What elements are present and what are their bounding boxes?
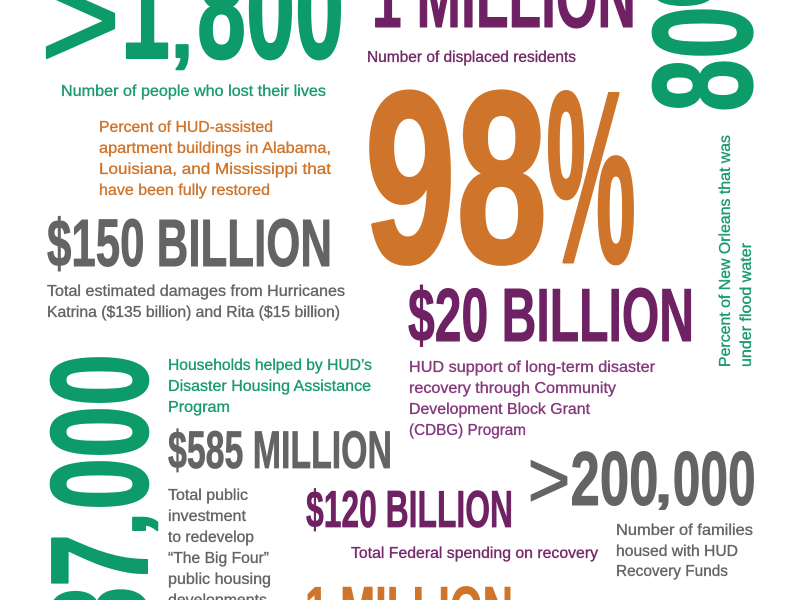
caption: federal spending: Total Federal spending on recovery bbox=[351, 545, 598, 562]
caption: families housed: Number of families bbox=[616, 522, 753, 539]
text: % bbox=[546, 40, 636, 314]
caption: CDBG support bbox=[409, 359, 655, 439]
stat: 98 percent: 98 bbox=[364, 40, 548, 314]
text block: HUD-assisted buildings bbox=[99, 119, 332, 199]
caption: displaced residents: Number of displaced residents bbox=[367, 49, 576, 66]
text block: HUD-assisted buildings: apartment buildings in Alabama, bbox=[99, 140, 331, 157]
caption: CDBG support: Development Block Grant bbox=[409, 401, 591, 418]
caption: lives lost: Number of people who lost their lives bbox=[61, 83, 326, 100]
caption: housing assistance: Disaster Housing Assistance bbox=[168, 378, 371, 395]
caption: Big Four investment: “The Big Four” bbox=[168, 550, 269, 567]
caption: CDBG support: recovery through Community bbox=[409, 380, 616, 397]
stat: over 200,000: , bbox=[655, 460, 672, 513]
caption: Big Four investment: investment bbox=[168, 508, 247, 525]
caption: Big Four investment: Total public bbox=[168, 487, 248, 504]
text block: HUD-assisted buildings: Percent of HUD-assisted bbox=[99, 119, 273, 136]
caption: CDBG support: (CDBG) Program bbox=[409, 422, 526, 439]
caption: housing assistance bbox=[168, 357, 372, 416]
stat: 87,000 rotated: 000 bbox=[23, 354, 177, 510]
caption: CDBG support: HUD support of long-term disaster bbox=[409, 359, 655, 376]
text block: HUD-assisted buildings: have been fully restored bbox=[99, 182, 270, 199]
caption: estimated damages: Katrina ($135 billion) and Rita ($15 billion) bbox=[47, 304, 340, 321]
caption: families housed bbox=[616, 522, 753, 580]
caption: Big Four investment bbox=[168, 487, 271, 600]
caption: flood water rotated: under flood water bbox=[738, 243, 755, 367]
caption: housing assistance: Program bbox=[168, 399, 230, 416]
stat: 87,000 rotated: , bbox=[73, 512, 162, 536]
stat: 150 billion: $150 BILLION bbox=[47, 206, 332, 281]
stat: 585 million: $585 MILLION bbox=[168, 421, 392, 480]
stat: over 200,000: 200 bbox=[570, 437, 658, 522]
caption: Big Four investment: to redevelop bbox=[168, 529, 254, 546]
caption: families housed: Recovery Funds bbox=[616, 563, 728, 580]
caption: housing assistance: Households helped by HUD’s bbox=[168, 357, 372, 374]
caption: flood water rotated bbox=[717, 135, 755, 367]
caption: Big Four investment: public housing bbox=[168, 571, 271, 588]
caption: estimated damages: Total estimated damages from Hurricanes bbox=[47, 283, 345, 300]
stat: 120 billion: $120 BILLION bbox=[306, 481, 513, 539]
text block: HUD-assisted buildings: Louisiana, and Mississippi that bbox=[99, 161, 332, 178]
caption: estimated damages bbox=[47, 283, 345, 321]
caption: families housed: housed with HUD bbox=[616, 543, 738, 560]
stat: over 200,000: 000 bbox=[673, 437, 756, 522]
caption: flood water rotated: Percent of New Orleans that was bbox=[717, 135, 734, 367]
stat: over 200,000: > bbox=[528, 435, 570, 524]
